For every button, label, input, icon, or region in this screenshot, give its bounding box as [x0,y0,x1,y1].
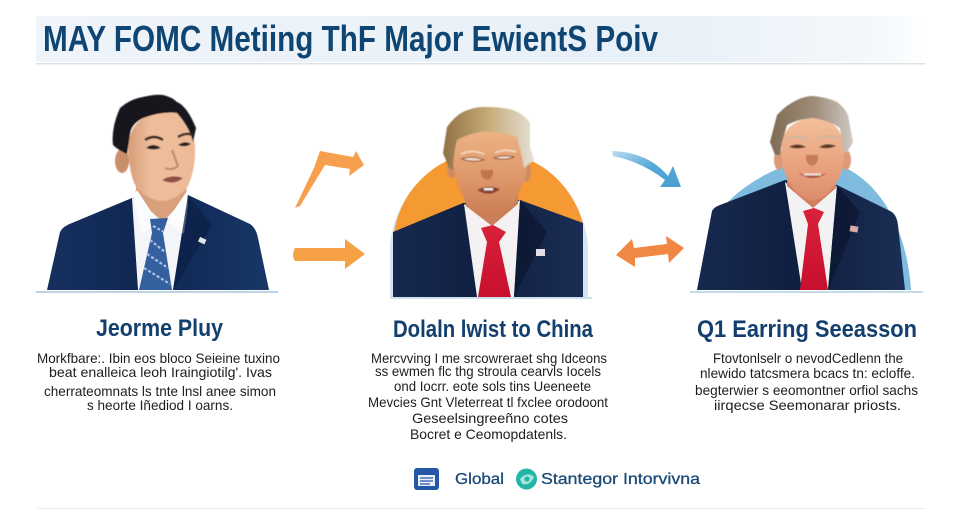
necktie [139,218,172,290]
body text: iirqecse Seemonarar priosts. [714,397,901,413]
body text: Bocret e Ceomopdatenls. [410,426,567,442]
lapel shading [828,186,860,290]
arch background [390,151,588,298]
eyes and brows [145,134,193,150]
body text: Mercvving I me srcowreraet shg Idceons [371,350,607,366]
head [443,107,534,218]
head [113,95,196,201]
body text: Geseelsingreeñno cotes [412,410,568,426]
lapel shading [173,195,212,290]
icon: calendar [414,468,439,490]
face [782,118,844,200]
column: earnings text [695,316,918,413]
arch background [725,160,911,290]
arrow: blue curved [612,151,681,187]
title: MAY FOMC Metiing ThF Major EwientS Poiv [43,18,658,59]
head [770,96,853,200]
eyes and brows [461,150,516,161]
body text: s heorte Iñediod I oarns. [87,397,233,413]
ears [774,150,784,170]
base line: Jerome [36,291,278,293]
arrow: orange double [616,236,684,267]
heading: Q1 Earring Seeasson [697,316,917,343]
icon: green badge [516,468,537,490]
collar [133,190,188,234]
ear [115,149,129,173]
arrow: orange bent up [295,151,364,208]
suit [393,200,583,297]
nose and smile [798,155,827,178]
column: Donald text [368,316,608,442]
footer legend [414,468,700,490]
eyes and brows [787,136,838,148]
body text [37,350,280,413]
neck [787,168,836,208]
base line: Donald [390,297,592,299]
body text: beat enalleica leoh Iraingiotilg'. Ivas [49,364,272,380]
body text: ss ewmen flc thg stroula cearvls Iocels [375,363,601,379]
hair [113,95,196,154]
title banner [36,16,925,64]
shirt [132,195,188,290]
ears [447,158,457,178]
body text: cherrateomnats ls tnte lnsl anee simon [44,383,276,399]
nose and mouth [162,150,183,183]
hair [443,107,534,170]
panel: earnings portrait [697,96,911,290]
nose and mouth [477,170,500,194]
neck [464,190,518,226]
shirt [464,200,520,297]
hair [770,96,853,155]
shirt [785,182,837,290]
base line: earnings [690,291,923,293]
heading: Jeorme Pluy [96,315,224,342]
lapel pin [536,249,545,256]
arrow: orange right [293,239,365,269]
body text: begterwier s eeomontner orfiol sachs [695,382,918,398]
necktie [800,208,828,290]
lapel pin [850,225,858,233]
neck [135,176,187,222]
panel: Donald portrait [390,107,588,298]
lapel pin [198,237,206,244]
face [453,128,527,218]
necktie [478,225,511,297]
suit [697,180,905,290]
lapel shading [514,200,547,297]
body text: ond Iocrr. eote sols tins Ueeneete [394,378,591,394]
body text [368,350,608,442]
body text: Mevcies Gnt Vleterreat tl fxclee orodoont [368,394,608,410]
column: Jerome text [37,315,280,413]
body text: Morkfbare:. Ibin eos bloco Seieine tuxino [37,350,280,366]
body text: nlewido tatcsmera bcacs tn: ecloffe. [700,365,915,381]
label: Global: Global [455,471,504,488]
suit [47,195,269,290]
face [128,112,195,201]
heading: Dolaln lwist to China [393,316,594,343]
body text [695,350,918,413]
label: Stantegor Intorvivna: Stantegor Intorvivna [541,471,700,488]
body text: Ftovtonlselr o nevodCedlenn the [713,350,903,366]
panel: Jerome portrait [47,95,269,290]
